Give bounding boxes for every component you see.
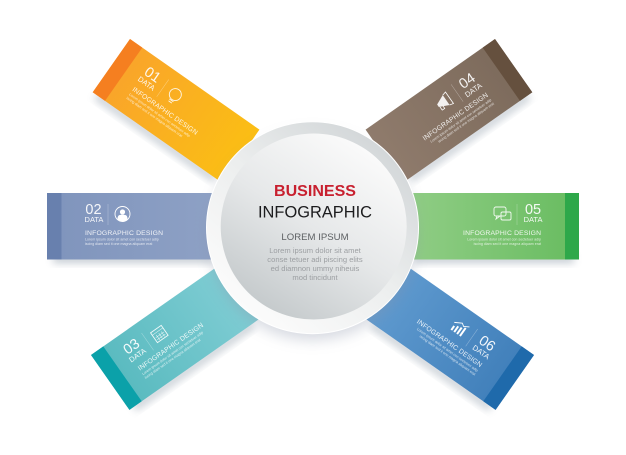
panel: bar 03 teal: Lorem ipsum dolor sit amet con sectetuer adip — [141, 331, 204, 376]
panel: bar 06 blue: Lorem ipsum dolor sit amet con sectetuer adip — [416, 327, 479, 373]
body text — [267, 246, 363, 282]
body text: Lorem ipsum dolor sit amet — [269, 246, 362, 255]
panel: bar 01 yellow: iscing diam sed it one magna aliquam erat — [126, 96, 183, 138]
panel: bar 01 yellow — [90, 39, 259, 187]
panel: bar 02 blue-grey — [47, 193, 217, 263]
panel: bar 06 blue — [363, 264, 534, 414]
heading: infographic: INFOGRAPHIC — [258, 204, 372, 222]
panel: bar 02 blue-grey: DATA — [85, 215, 103, 224]
panel: bar 06 blue: iscing diam sed it one magna aliquam erat — [419, 334, 476, 376]
body text: mod tincidunt — [292, 273, 338, 282]
panel: bar 04 brown: Lorem ipsum dolor sit amet con sectetuer adip — [430, 98, 492, 144]
panel: bar 04 brown: INFOGRAPHIC DESIGN — [422, 92, 490, 142]
panel: bar 02 blue-grey: INFOGRAPHIC DESIGN — [85, 230, 163, 237]
panel: bar 03 teal: INFOGRAPHIC DESIGN — [137, 322, 205, 372]
panel: bar 06 blue: DATA — [471, 343, 491, 361]
panel: bar 05 green: iscing diam sed it one magna aliquam erat — [474, 242, 541, 246]
subheading: LOREM IPSUM — [281, 232, 349, 243]
panel: bar 03 teal: iscing diam sed it one magna aliquam erat — [144, 338, 201, 380]
panel: bar 04 brown: iscing diam sed it one magna aliquam erat — [437, 102, 495, 144]
panel: bar 04 brown: DATA — [463, 81, 484, 99]
panel: bar 05 green: DATA — [524, 215, 542, 224]
panel: bar 01 yellow: DATA — [136, 74, 157, 93]
panel: bar 01 yellow: 01 — [141, 64, 163, 86]
panel: bar 06 blue: 06 — [476, 333, 498, 355]
body text: conse tetuer adi piscing elits — [267, 255, 363, 264]
body text: ed diamnon ummy niheuis — [271, 264, 360, 273]
panel: bar 06 blue: INFOGRAPHIC DESIGN — [415, 319, 483, 369]
heading: business: BUSINESS — [274, 183, 356, 200]
panel: bar 05 green — [409, 193, 579, 263]
panel: bar 05 green: Lorem ipsum dolor sit amet con sectetuer adip — [467, 238, 541, 242]
panel: bar 05 green: INFOGRAPHIC DESIGN — [463, 230, 541, 237]
panel: bar 04 brown — [366, 39, 535, 187]
panel: bar 02 blue-grey: Lorem ipsum dolor sit amet con sectetuer adip — [85, 238, 159, 242]
panel: bar 03 teal: 03 — [121, 336, 143, 358]
panel: bar 04 brown: 04 — [456, 70, 479, 93]
panel: bar 03 teal: DATA — [127, 346, 148, 364]
panel: bar 05 green: 05 — [525, 202, 541, 218]
panel: bar 01 yellow: INFOGRAPHIC DESIGN — [131, 86, 199, 137]
panel: bar 02 blue-grey: iscing diam sed it one magna aliquam erat — [85, 242, 152, 246]
panel: bar 01 yellow: Lorem ipsum dolor sit amet con sectetuer adip — [128, 92, 191, 138]
panel: central circle — [206, 121, 419, 340]
panel: bar 02 blue-grey: 02 — [85, 202, 102, 218]
panel: bar 03 teal — [91, 264, 262, 414]
